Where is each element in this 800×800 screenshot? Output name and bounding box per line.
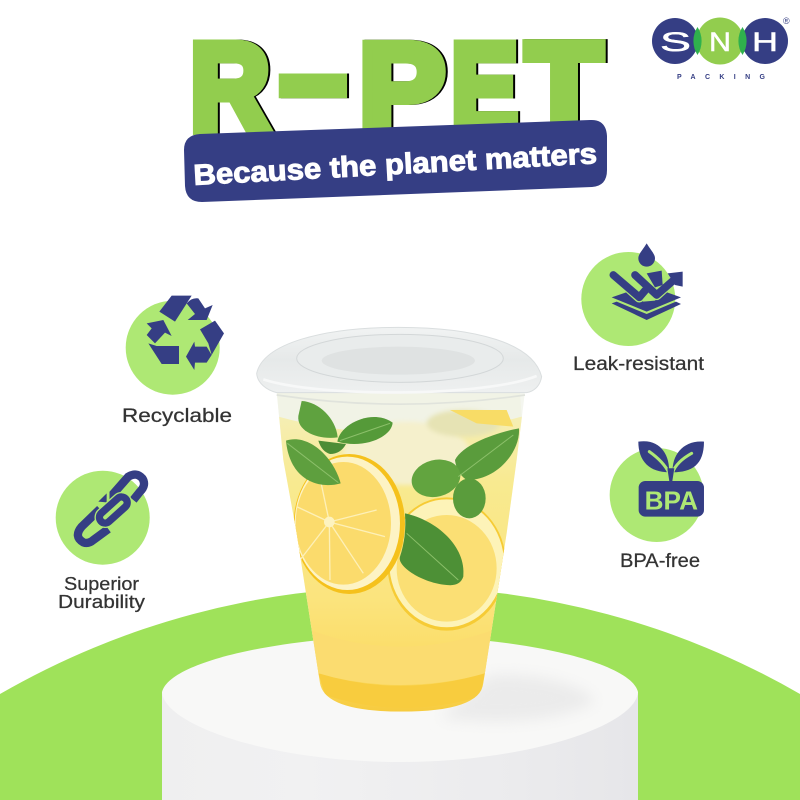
title letters: T (526, 19, 602, 157)
icon: recyclable (126, 296, 224, 395)
cup body (277, 392, 525, 712)
icon: leak-resistant (581, 243, 683, 346)
photo: lemonade cup with lid (257, 327, 542, 717)
lemon slice front (294, 454, 405, 594)
tagline text: Because the planet matters (193, 138, 598, 192)
label: Superior Durability (58, 573, 146, 612)
title letters: P (359, 19, 445, 157)
title shadow (192, 7, 604, 157)
SNH Packing logo (652, 16, 790, 81)
icon: BPA-free (610, 441, 704, 542)
label: Leak-resistant: Leak-resistant (573, 354, 705, 375)
tagline banner (184, 120, 607, 202)
title letters: E (451, 19, 518, 157)
title shadow: - (281, 7, 349, 145)
label: Recyclable: Recyclable (122, 405, 232, 427)
icon: chain link (56, 471, 150, 565)
lemon slice back (387, 497, 506, 631)
title: R-PET (190, 7, 604, 157)
SNH Packing logo: ® (783, 16, 790, 26)
liquid (279, 416, 522, 712)
title letters: R (190, 19, 270, 157)
title letters: - (279, 7, 347, 145)
title shadow: T (528, 19, 604, 157)
lid (257, 327, 542, 404)
white pedestal (162, 636, 638, 800)
title letters (190, 7, 602, 157)
mint leaves (286, 401, 519, 585)
SNH Packing logo: PACKING (677, 74, 766, 81)
SNH Packing logo: N (709, 27, 731, 57)
label: BPA-free: BPA-free (620, 551, 700, 572)
SNH Packing logo: S (660, 27, 691, 57)
green arc background (0, 587, 800, 800)
title shadow: P (361, 19, 447, 157)
label: Superior Durability: Superior (64, 573, 139, 594)
SNH Packing logo: H (752, 27, 778, 57)
icon: BPA-free: BPA (645, 485, 698, 515)
title shadow: R (192, 19, 272, 157)
title shadow: E (453, 19, 520, 157)
label: Superior Durability: Durability (58, 591, 146, 612)
